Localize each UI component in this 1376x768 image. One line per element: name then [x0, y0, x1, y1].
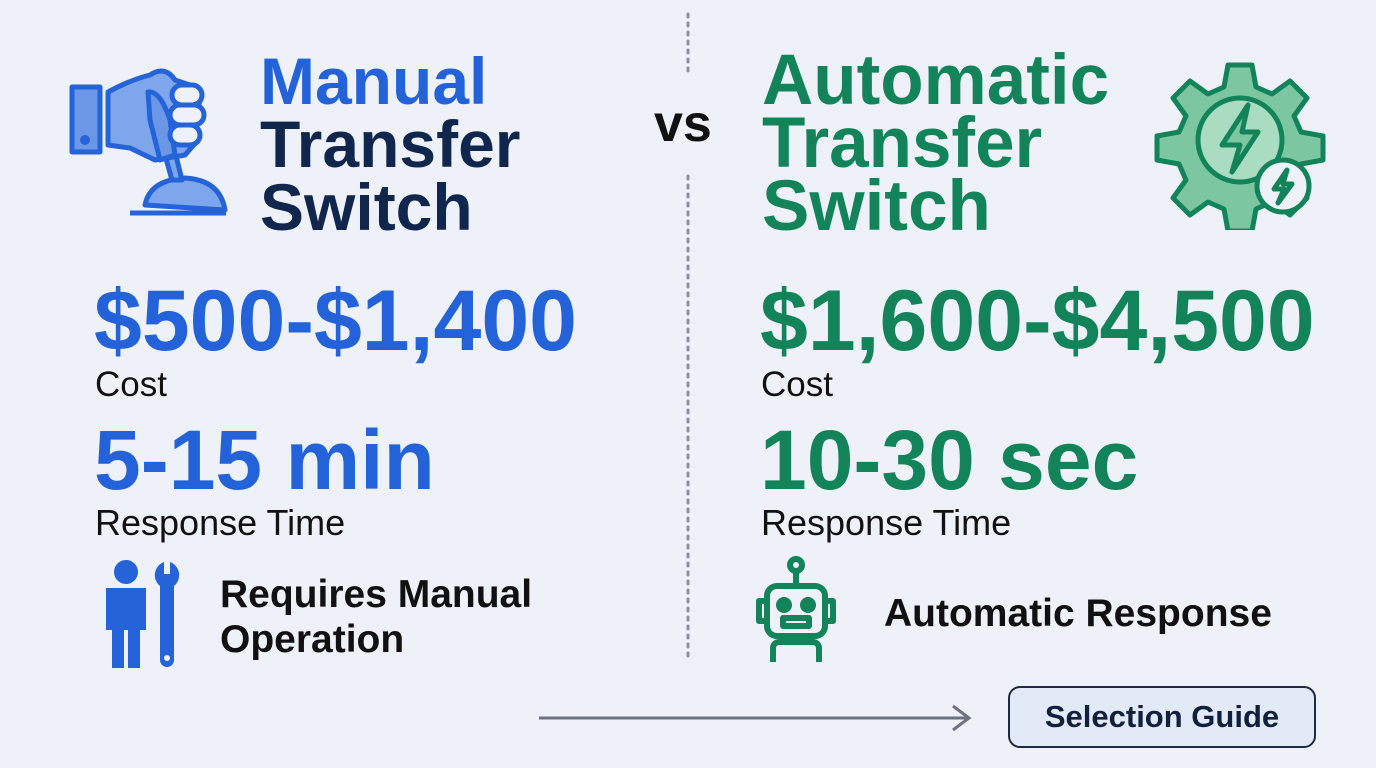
text: automatic response: Automatic Response: [884, 592, 1272, 635]
vs label: vs: [654, 95, 712, 153]
icon: gear with bolt: [1154, 62, 1326, 230]
icon: robot: [756, 556, 836, 662]
title: manual transfer switch: Transfer: [260, 107, 520, 181]
title: manual transfer switch: [260, 44, 520, 244]
manual response time: Response Time: [95, 502, 345, 543]
text: requires manual operation: Operation: [220, 618, 404, 661]
title: automatic transfer switch: [762, 41, 1109, 246]
title: manual transfer switch: Switch: [260, 170, 473, 244]
button: selection guide: [1008, 686, 1316, 748]
icon: person with wrench: [106, 560, 180, 668]
automatic response time: Response Time: [761, 502, 1011, 543]
title: automatic transfer switch: Automatic: [762, 41, 1109, 120]
button: selection guide: Selection Guide: [1045, 699, 1279, 734]
title: automatic transfer switch: Transfer: [762, 104, 1042, 183]
title: manual transfer switch: Manual: [260, 44, 487, 118]
title: automatic transfer switch: Switch: [762, 167, 991, 246]
automatic cost: $1,600-$4,500: [760, 273, 1315, 369]
automatic cost: Cost: [761, 365, 833, 404]
manual response time: 5-15 min: [94, 413, 435, 507]
manual cost: $500-$1,400: [94, 273, 577, 369]
arrow: [539, 704, 972, 732]
text: requires manual operation: Requires Manual: [220, 573, 532, 616]
icon: hand on lever: [70, 68, 228, 216]
automatic response time: 10-30 sec: [760, 413, 1138, 507]
manual cost: Cost: [95, 365, 167, 404]
text: requires manual operation: [220, 573, 532, 661]
